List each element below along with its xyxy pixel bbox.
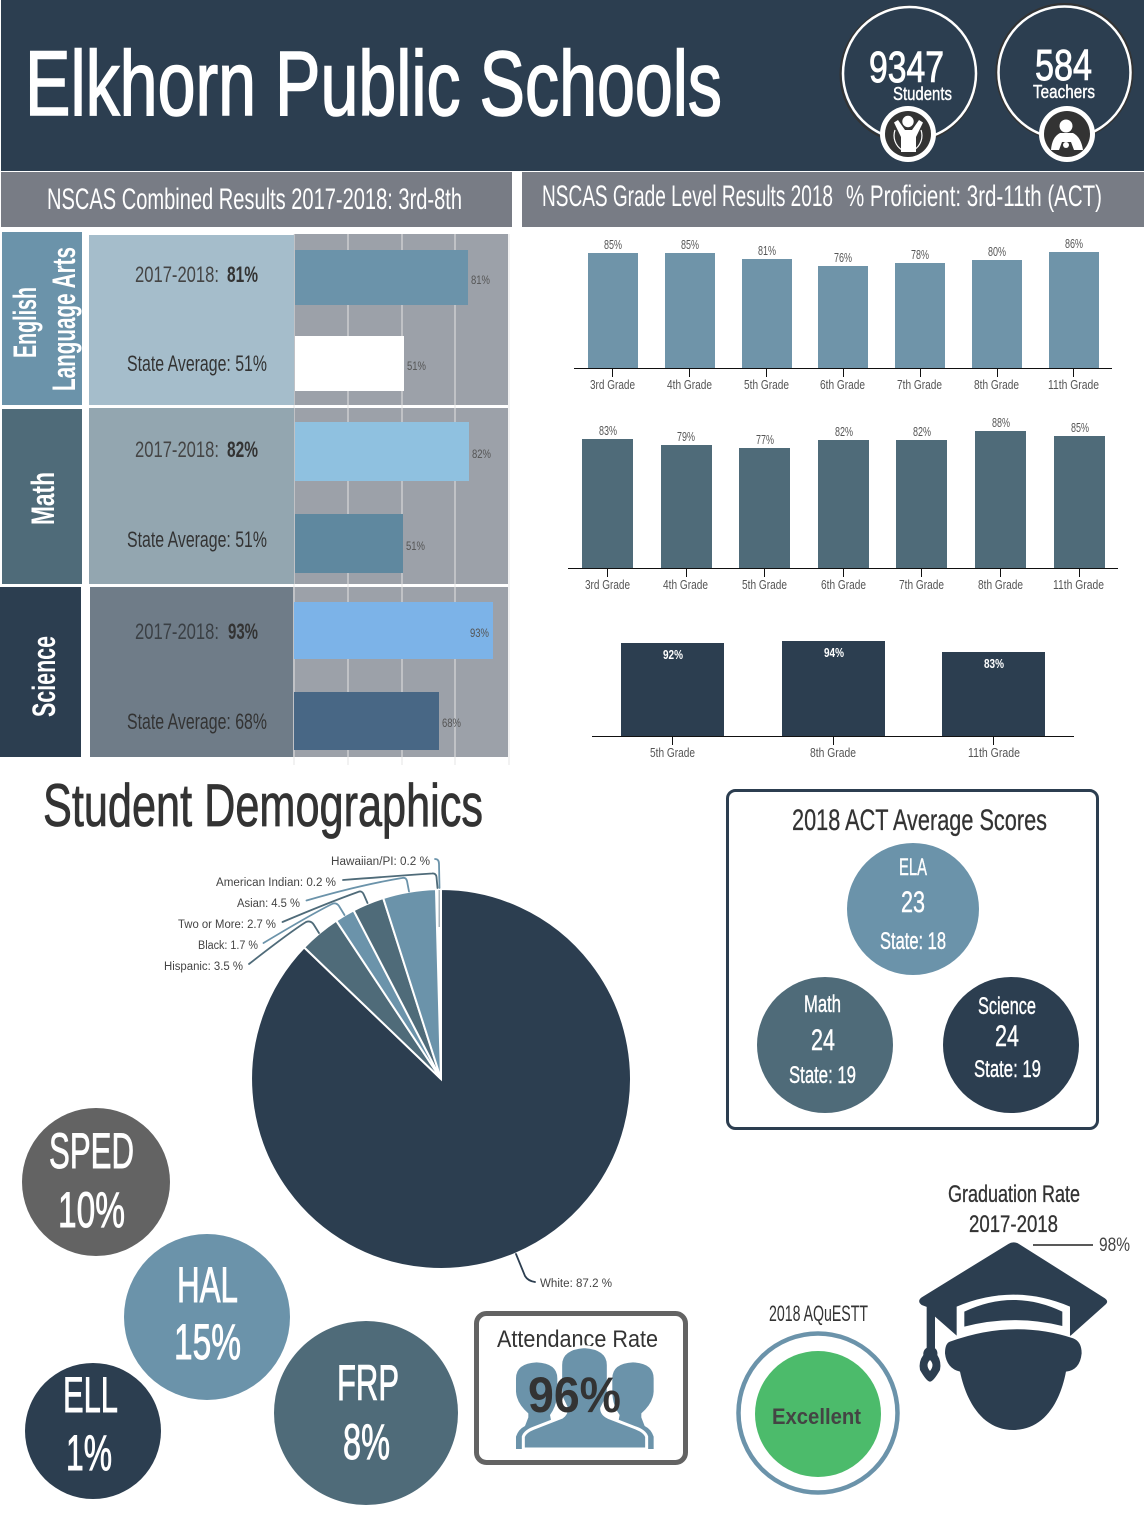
bar chart: Science by grade: 5th Grade — [650, 746, 695, 760]
pie labels: Hawaiian/PI: 0.2 % — [331, 856, 430, 868]
slice: Black — [336, 910, 441, 1079]
graduation rate — [919, 1181, 1130, 1430]
panel: Science: 93% — [470, 628, 489, 640]
panel: Math: State Average: 51% — [127, 527, 267, 552]
graduation rate: 98% — [1099, 1235, 1130, 1256]
panel: Math — [2, 408, 491, 584]
panel: English Language Arts: 81% — [227, 262, 258, 287]
bar chart: Math by grade: 8th Grade — [978, 578, 1023, 592]
bar chart: Math by grade: 88% — [992, 416, 1010, 430]
bar: Math 2017-2018 — [295, 422, 469, 481]
circle: Science: State: 19 — [974, 1056, 1041, 1083]
bar chart: ELA by grade: 6th Grade — [820, 378, 865, 392]
slice: Asian — [383, 889, 441, 1079]
stat: teachers: 584 — [1035, 41, 1092, 90]
section heading: combined results: NSCAS Combined Results 2017-2018: 3rd-8th — [47, 183, 462, 216]
slices: American Indian and Hawaiian/PI — [438, 890, 440, 927]
bar: ELA 2017-2018 — [295, 250, 468, 305]
panel: attendance rate: 96% — [528, 1367, 621, 1423]
bar chart: ELA by grade: 11th Grade — [1048, 378, 1099, 392]
panel: Science: 93% — [228, 619, 258, 644]
section heading: combined results — [1, 172, 512, 227]
icon: child with raised arms — [880, 106, 936, 162]
bar: Science state — [294, 692, 439, 750]
circle: ELA: 23 — [901, 886, 925, 919]
panel: Math: 2017-2018: — [135, 437, 219, 462]
circle: ELL: ELL — [63, 1367, 118, 1423]
bar chart: Science by grade: 83% — [984, 657, 1004, 671]
icon: adult with child — [1039, 106, 1095, 162]
bar chart: ELA by grade: 5th Grade — [744, 378, 789, 392]
bar chart: ELA by grade: 85% — [681, 238, 699, 252]
bar chart: ELA by grade: 80% — [988, 245, 1006, 259]
panel: ACT average scores — [728, 790, 1098, 1128]
bar chart: ELA by grade: 78% — [911, 248, 929, 262]
bar chart: ELA by grade: 4th Grade — [667, 378, 712, 392]
bar chart: Science by grade: 92% — [663, 648, 683, 662]
chart grid background — [293, 234, 509, 765]
bar: Math state — [295, 514, 403, 573]
graduation rate: 2017-2018 — [969, 1211, 1058, 1238]
circle: SPED: 10% — [58, 1182, 125, 1238]
panel: Science: Science — [26, 636, 62, 717]
circle: HAL — [124, 1234, 290, 1400]
circle: Math: Math — [804, 991, 841, 1018]
panel: Math: 82% — [472, 449, 491, 461]
AQuESTT rating: Excellent — [772, 1404, 862, 1429]
circle: ELA — [847, 843, 979, 975]
circle: Math — [757, 977, 893, 1113]
bar chart: Science by grade: 8th Grade — [810, 746, 856, 760]
stat: students — [840, 6, 976, 162]
bar chart: Math by grade: 7th Grade — [899, 578, 944, 592]
heading: student demographics: Student Demographics — [43, 772, 483, 839]
circle: FRP: FRP — [337, 1355, 399, 1411]
circle: SPED: SPED — [49, 1123, 134, 1179]
bar chart: Math by grade — [568, 416, 1118, 592]
panel: English Language Arts — [2, 232, 490, 405]
circle: ELL — [25, 1363, 161, 1499]
stat: students: Students — [893, 84, 952, 104]
icon: graduate with cap — [919, 1242, 1107, 1430]
section heading: grade level results — [522, 172, 1144, 227]
panel: English Language Arts: English — [7, 287, 43, 358]
bar chart: Math by grade: 3rd Grade — [585, 578, 630, 592]
circle: Science: 24 — [995, 1020, 1019, 1053]
bar chart: ELA by grade: 85% — [604, 238, 622, 252]
bar chart: Math by grade: 83% — [599, 424, 617, 438]
circle: HAL: 15% — [174, 1314, 241, 1370]
bar chart: Math by grade: 79% — [677, 430, 695, 444]
bar chart: Math by grade: 82% — [913, 425, 931, 439]
panel: attendance rate — [476, 1314, 686, 1462]
panel: English Language Arts: 2017-2018: — [135, 262, 219, 287]
panel: Math: 51% — [406, 541, 425, 553]
pie chart: student demographics — [164, 856, 631, 1290]
bar chart: Math by grade: 85% — [1071, 421, 1089, 435]
bar: ELA state — [295, 336, 404, 391]
panel: Math: 82% — [227, 437, 258, 462]
circle: FRP: 8% — [343, 1414, 390, 1470]
panel: Science: 2017-2018: — [135, 619, 219, 644]
section heading: grade level results: NSCAS Grade Level Results 2018 — [542, 180, 833, 213]
panel: English Language Arts: 51% — [407, 361, 426, 373]
leader lines — [249, 859, 535, 1282]
circle: ELL: 1% — [66, 1425, 112, 1481]
panel: Science — [0, 587, 493, 757]
circle: HAL: HAL — [177, 1257, 238, 1313]
slice: White — [251, 889, 631, 1269]
bar chart: ELA by grade: 76% — [834, 251, 852, 265]
panel: English Language Arts: Language Arts — [46, 247, 82, 391]
panel: ACT average scores: 2018 ACT Average Scores — [792, 804, 1047, 837]
header banner — [1, 0, 1144, 171]
graduation rate: Graduation Rate — [948, 1181, 1080, 1208]
pie labels: American Indian: 0.2 % — [216, 877, 336, 889]
circle: ELA: ELA — [899, 854, 927, 881]
bar chart: Math by grade: 11th Grade — [1053, 578, 1104, 592]
pie labels: Two or More: 2.7 % — [178, 919, 276, 931]
bar chart: ELA by grade: 3rd Grade — [590, 378, 635, 392]
panel: Math: Math — [25, 472, 61, 525]
circle: SPED — [22, 1108, 170, 1256]
pie labels — [164, 856, 612, 1290]
pie labels: Asian: 4.5 % — [237, 898, 300, 910]
slice: Two or More — [354, 898, 441, 1079]
bar chart: ELA by grade: 86% — [1065, 237, 1083, 251]
pie labels: Black: 1.7 % — [198, 940, 258, 952]
AQuESTT rating: 2018 AQuESTT — [769, 1301, 868, 1326]
bar chart: Math by grade: 5th Grade — [742, 578, 787, 592]
title: Elkhorn Public Schools — [25, 33, 722, 135]
circle: Math: State: 19 — [789, 1062, 856, 1089]
icon: group of people — [516, 1347, 654, 1449]
panel: Science: State Average: 68% — [127, 709, 267, 734]
bar chart: Science by grade: 94% — [824, 646, 844, 660]
panel: English Language Arts: State Average: 51% — [127, 351, 267, 376]
panel: attendance rate: Attendance Rate — [497, 1326, 658, 1353]
circle: Math: 24 — [811, 1024, 835, 1057]
circle: Science — [943, 977, 1079, 1113]
bar: Science 2017-2018 — [294, 602, 493, 659]
bar chart: ELA by grade: 7th Grade — [897, 378, 942, 392]
circle: Science: Science — [978, 993, 1036, 1020]
panel: Science: 68% — [442, 718, 461, 730]
stat: teachers: Teachers — [1033, 82, 1095, 102]
stat: teachers — [996, 4, 1132, 162]
circle: ELA: State: 18 — [880, 928, 946, 955]
pie labels: White: 87.2 % — [540, 1278, 612, 1290]
bar chart: Science by grade: 11th Grade — [968, 746, 1020, 760]
bar chart: Math by grade: 6th Grade — [821, 578, 866, 592]
panel: English Language Arts: 81% — [471, 275, 490, 287]
circle: FRP — [274, 1321, 458, 1505]
bar chart: Math by grade: 4th Grade — [663, 578, 708, 592]
bar chart: Math by grade: 82% — [835, 425, 853, 439]
stat: students: 9347 — [869, 43, 944, 92]
bar chart: ELA by grade: 81% — [758, 244, 776, 258]
bar chart: Math by grade: 77% — [756, 433, 774, 447]
bar chart: Science by grade — [592, 641, 1074, 760]
pie labels: Hispanic: 3.5 % — [164, 961, 243, 973]
AQuESTT rating — [738, 1301, 898, 1492]
bar chart: ELA by grade: 8th Grade — [974, 378, 1019, 392]
slice: Hispanic — [304, 921, 441, 1079]
bar chart: ELA by grade — [574, 237, 1112, 392]
